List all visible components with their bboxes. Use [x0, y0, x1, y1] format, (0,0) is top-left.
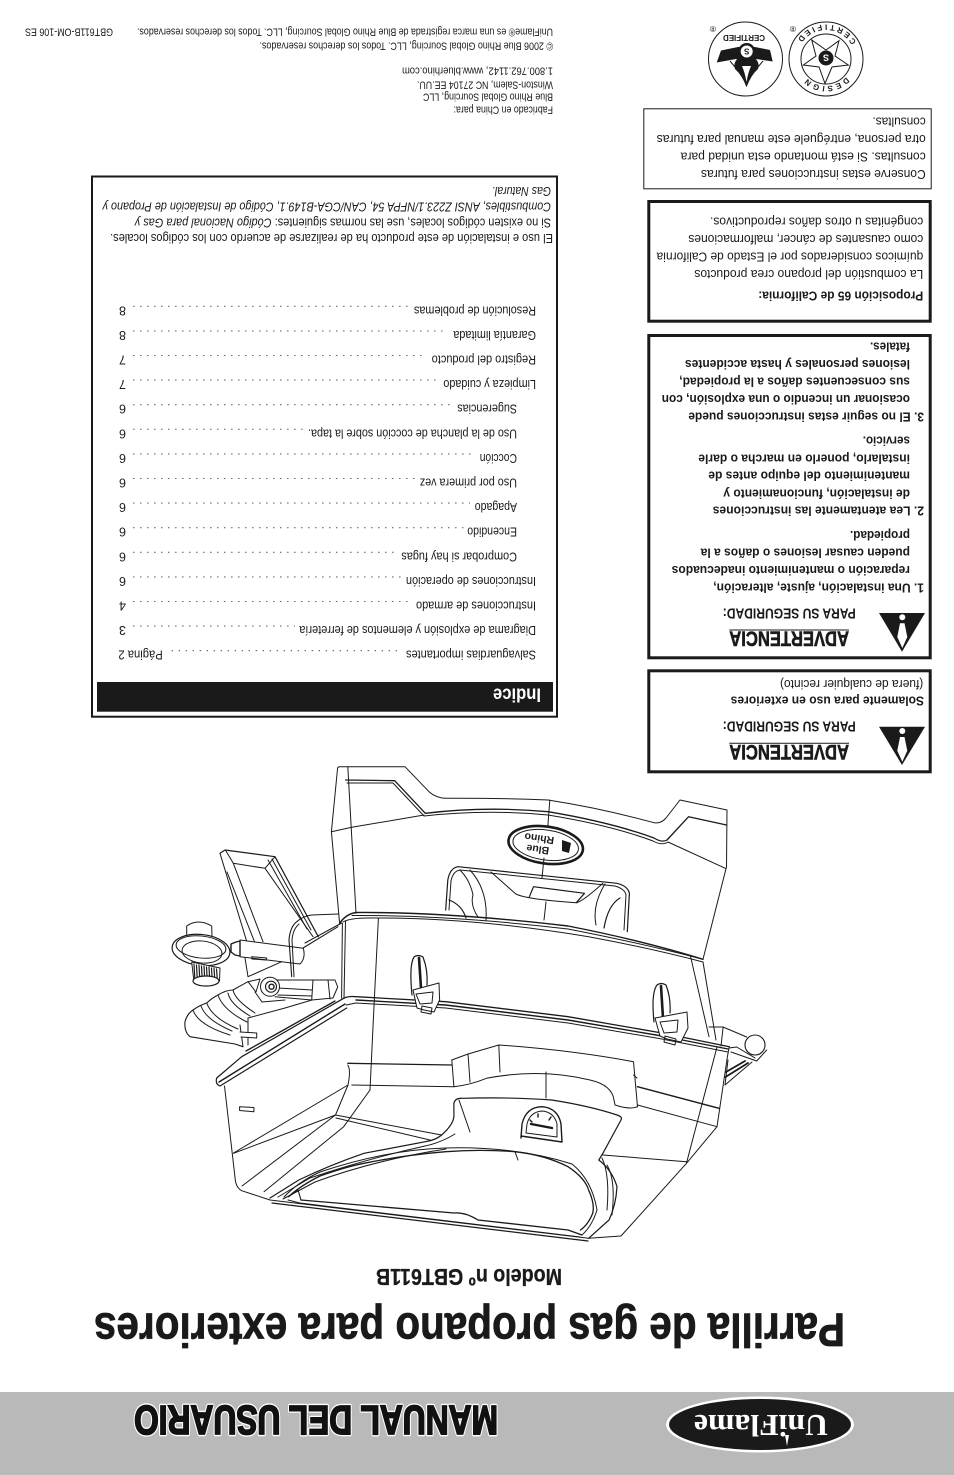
contents rows: Comprobar si hay fugas	[401, 549, 517, 563]
footer: manufacturer and copyright: UniFlame® es una marca registrada de Blue Rhino Global Sourcing, LLC. Todos los derechos reservados.	[137, 25, 553, 37]
latch left	[411, 956, 440, 1014]
panel: California proposition 65: La combustión del propano crea productos	[694, 267, 923, 281]
logo: UniFlame	[666, 1396, 854, 1452]
warning list: 1. Una instalación, ajuste, alteración,	[713, 580, 924, 595]
footer: manufacturer and copyright: 1.800.762.1142, www.bluerhino.com	[402, 65, 553, 77]
contents rows: Diagrama de explosión y elementos de ferretería	[299, 623, 536, 637]
gas hose and regulator pipe	[231, 914, 342, 977]
icon: design certified seal	[788, 22, 864, 96]
icon: design certified seal: S	[823, 52, 829, 62]
contents rows: Uso de la plancha de cocción sobre la tapa.	[308, 426, 517, 440]
contents rows: 7	[119, 377, 126, 391]
panel: keep instructions notice: consultas.	[872, 114, 926, 128]
lid handle recess	[446, 858, 629, 932]
footer: manufacturer and copyright: Blue Rhino Global Sourcing, LLC	[423, 90, 553, 102]
warning list: lesiones personales y hasta accidentes	[685, 357, 910, 372]
legal note: El uso e instalación de este producto ha de realizarse de acuerdo con los códigos locales.	[110, 231, 553, 245]
footer: manufacturer and copyright: Fabricado en China para:	[454, 104, 553, 116]
logo: UniFlame: UniFlame	[694, 1408, 828, 1443]
contents rows: Instrucciones de operación	[406, 574, 536, 588]
warning text: Solamente para uso en exteriores	[731, 694, 924, 709]
lid badge: Blue Rhino	[506, 821, 585, 869]
contents rows: Resolución de problemas	[414, 303, 536, 317]
warning heading: PARA SU SEGURIDAD:	[723, 718, 856, 734]
heading: manual del usuario: MANUAL DEL USUARIO	[134, 1397, 498, 1443]
contents rows: 8	[119, 328, 126, 342]
contents rows: Uso por primera vez	[420, 476, 517, 490]
contents rows: 6	[119, 500, 126, 514]
thermometer gauge	[521, 1107, 562, 1142]
contents rows: Apagado	[475, 500, 517, 514]
contents rows: 6	[119, 451, 126, 465]
icon: design certified seal: ®	[789, 24, 796, 34]
panel: keep instructions notice: otra persona, entréguele este manual para futuras	[657, 132, 926, 146]
burner valve assembly	[185, 977, 338, 1051]
contents rows: 6	[119, 426, 126, 440]
warning list: pueden causar lesiones o daños a la	[700, 545, 910, 560]
icon: warning triangle	[879, 727, 925, 765]
icon: design certified seal: CERTIFIED	[799, 24, 856, 44]
contents rows: 6	[119, 525, 126, 539]
panel: California proposition 65	[649, 202, 930, 321]
warning list: servicio.	[863, 434, 910, 449]
panel: table of contents	[92, 176, 557, 717]
warning text: (fuera de cualquier recinto)	[780, 677, 923, 691]
contents header	[97, 682, 553, 712]
icon: design certified seal: DESIGN	[804, 78, 850, 92]
contents rows: 6	[119, 402, 126, 416]
legal note: Gas Natural.	[492, 184, 551, 198]
warning list: de instalación, funcionamiento y	[723, 486, 910, 501]
contents rows: 7	[119, 352, 126, 366]
contents rows: Instrucciones de armado	[416, 598, 536, 612]
panel: main safety warning	[649, 336, 930, 658]
icon: warning triangle	[879, 613, 925, 652]
legal note: Combustibles, ANSI Z223.1/NFPA 54, CAN/CGA-B149.1, Código de Instalación de Propano y	[102, 200, 551, 214]
warning heading: ADVERTENCIA	[729, 627, 849, 651]
panel: keep instructions notice: consultas. Si está montando esta unidad para	[681, 150, 926, 164]
warning heading	[723, 718, 856, 764]
warning list: instalarlo, ponerlo en marcha o darle	[698, 451, 910, 466]
warning heading: ADVERTENCIA	[729, 740, 849, 764]
contents rows: 6	[119, 549, 126, 563]
contents rows: 6	[119, 476, 126, 490]
icon: certified seal: CERTIFIED	[723, 33, 765, 43]
footer: manufacturer and copyright: Winston-Salem, NC 27104 EE.UU.	[417, 79, 553, 91]
regulator knob	[171, 922, 231, 986]
lid badge: Blue Rhino: Blue	[526, 841, 550, 856]
right end handle knob	[709, 1027, 767, 1085]
contents rows: 3	[119, 623, 126, 637]
panel: California proposition 65: Proposición 65 de California:	[758, 289, 923, 304]
warning text	[731, 677, 924, 709]
contents header: Indice	[493, 684, 541, 704]
contents rows: 6	[119, 574, 126, 588]
heading: manual del usuario: MANUAL DEL USUARIO	[134, 1397, 498, 1443]
footer: manufacturer and copyright: © 2006 Blue Rhino Global Sourcing, LLC. Todos los derechos reservados.	[260, 39, 553, 51]
grill lower firebox	[216, 998, 729, 1241]
panel: California proposition 65: químicos considerados por el Estado de California	[657, 249, 923, 263]
contents rows: Página 2	[118, 648, 163, 662]
footer: manufacturer and copyright	[137, 25, 553, 116]
panel: California proposition 65: congénitas u otros daños reproductivos.	[710, 214, 923, 228]
contents rows: 8	[119, 303, 126, 317]
footer: document code: GBT611B-OM-106 ES	[25, 25, 113, 37]
grill body middle	[342, 918, 729, 1090]
warning list: fatales.	[870, 339, 910, 354]
warning list: ocasionar un incendio o una explosión, con	[662, 392, 910, 407]
warning list: sus consecuentes daños a la propiedad,	[679, 374, 910, 389]
contents rows: 4	[119, 598, 126, 612]
lid badge: Blue Rhino: Rhino	[524, 830, 555, 846]
band: grey header	[0, 1392, 954, 1475]
model number: Modelo nº GBT611B	[376, 1264, 562, 1290]
warning heading: PARA SU SEGURIDAD:	[723, 604, 856, 620]
contents rows: Garantía limitada	[453, 328, 536, 342]
contents rows: Registro del producto	[432, 352, 536, 366]
panel: California proposition 65: como causantes de cáncer, malformaciones	[688, 232, 923, 246]
side shelf frame	[220, 850, 318, 947]
illustration: gas grill line drawing	[171, 767, 767, 1241]
legal note	[102, 184, 553, 245]
panel: warning outdoor use	[649, 671, 930, 772]
latch right	[653, 984, 688, 1045]
icon: certified seal	[708, 22, 782, 96]
lid upper shell	[331, 767, 727, 962]
icon: certified seal: ®	[709, 24, 716, 34]
warning list: mantenimiento del equipo antes de	[708, 469, 910, 484]
panel: keep instructions notice: Conserve estas instrucciones para futuras	[701, 167, 926, 181]
warning list: 3. El no seguir estas instrucciones puede	[688, 410, 924, 425]
warning list: reparación o mantenimiento inadecuados	[672, 563, 910, 578]
legal note: Si no existen códigos locales, use las normas siguientes: Código Nacional para Gas y	[134, 216, 551, 230]
contents rows: Encendido	[467, 525, 517, 539]
icon: certified seal: S	[743, 46, 749, 56]
warning list: 2. Lea atentamente las instrucciones	[713, 504, 924, 519]
contents rows: Limpieza y cuidado	[443, 377, 536, 391]
contents rows	[118, 303, 536, 662]
front handle	[452, 1045, 638, 1108]
warning list: propiedad.	[850, 528, 910, 543]
contents rows: Salvaguardias importantes	[406, 648, 536, 662]
contents rows: Cocción	[480, 451, 517, 465]
warning heading	[723, 604, 856, 651]
panel: keep instructions notice	[644, 109, 931, 189]
warning list	[662, 339, 924, 595]
contents rows: Sugerencias	[457, 402, 517, 416]
lower opening rim	[270, 1098, 622, 1238]
